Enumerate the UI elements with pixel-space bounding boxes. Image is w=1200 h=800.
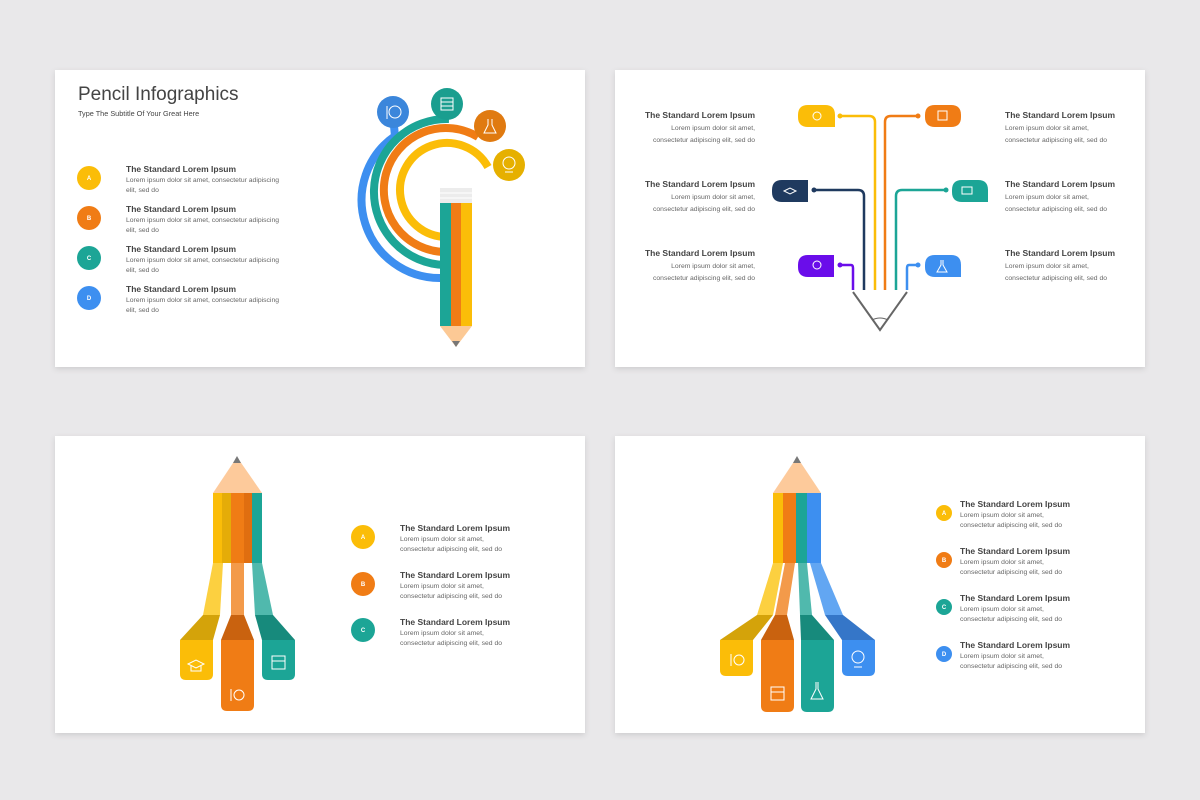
left texts: consectetur adipiscing elit, sed do	[653, 206, 755, 213]
legend: consectetur adipiscing elit, sed do	[960, 663, 1062, 670]
pencil	[180, 456, 295, 711]
pencil lines	[814, 116, 946, 290]
panel: pencil arcs	[55, 70, 585, 367]
panel: three branch pencil	[55, 436, 585, 733]
left texts	[645, 110, 755, 282]
left texts: consectetur adipiscing elit, sed do	[653, 137, 755, 144]
legend: A	[942, 511, 947, 517]
legend: The Standard Lorem Ipsum	[400, 523, 510, 533]
legend list: Lorem ipsum dolor sit amet, consectetur adipiscing	[126, 217, 279, 224]
pencil	[720, 456, 875, 712]
left texts: The Standard Lorem Ipsum	[645, 110, 755, 120]
legend	[936, 499, 1070, 670]
legend list	[77, 164, 279, 314]
legend list: C	[87, 256, 92, 262]
legend: consectetur adipiscing elit, sed do	[400, 640, 502, 647]
legend: consectetur adipiscing elit, sed do	[960, 616, 1062, 623]
panel: four branch pencil	[615, 436, 1145, 733]
left texts: The Standard Lorem Ipsum	[645, 248, 755, 258]
legend list: A	[87, 176, 92, 182]
icon circles	[377, 96, 409, 128]
legend list: elit, sed do	[126, 307, 159, 314]
legend: The Standard Lorem Ipsum	[400, 570, 510, 580]
subtitle: Type The Subtitle Of Your Great Here	[78, 109, 199, 118]
legend list: Lorem ipsum dolor sit amet, consectetur adipiscing	[126, 297, 279, 304]
right texts: consectetur adipiscing elit, sed do	[1005, 137, 1107, 144]
legend: D	[942, 652, 947, 658]
left texts: consectetur adipiscing elit, sed do	[653, 275, 755, 282]
legend list: The Standard Lorem Ipsum	[126, 204, 236, 214]
legend: Lorem ipsum dolor sit amet,	[960, 512, 1044, 519]
legend: Lorem ipsum dolor sit amet,	[400, 536, 484, 543]
right texts: Lorem ipsum dolor sit amet,	[1005, 125, 1089, 132]
legend: Lorem ipsum dolor sit amet,	[960, 606, 1044, 613]
left texts: Lorem ipsum dolor sit amet,	[671, 125, 755, 132]
right texts: consectetur adipiscing elit, sed do	[1005, 206, 1107, 213]
legend list: B	[87, 216, 92, 222]
legend: B	[942, 558, 947, 564]
legend: The Standard Lorem Ipsum	[400, 617, 510, 627]
legend: consectetur adipiscing elit, sed do	[960, 522, 1062, 529]
legend: The Standard Lorem Ipsum	[960, 640, 1070, 650]
left texts: Lorem ipsum dolor sit amet,	[671, 194, 755, 201]
legend list: elit, sed do	[126, 267, 159, 274]
legend: C	[361, 628, 366, 634]
legend: consectetur adipiscing elit, sed do	[960, 569, 1062, 576]
legend: Lorem ipsum dolor sit amet,	[400, 630, 484, 637]
legend: consectetur adipiscing elit, sed do	[400, 546, 502, 553]
icon tabs	[772, 105, 988, 277]
legend list: elit, sed do	[126, 187, 159, 194]
right texts: The Standard Lorem Ipsum	[1005, 179, 1115, 189]
legend list: The Standard Lorem Ipsum	[126, 164, 236, 174]
legend: The Standard Lorem Ipsum	[960, 499, 1070, 509]
title: Pencil Infographics	[78, 84, 239, 105]
left texts: Lorem ipsum dolor sit amet,	[671, 263, 755, 270]
right texts: Lorem ipsum dolor sit amet,	[1005, 194, 1089, 201]
right texts: Lorem ipsum dolor sit amet,	[1005, 263, 1089, 270]
legend: B	[361, 582, 366, 588]
legend list: The Standard Lorem Ipsum	[126, 244, 236, 254]
right texts: The Standard Lorem Ipsum	[1005, 110, 1115, 120]
panel: branching lines pencil	[615, 70, 1145, 367]
legend list: Lorem ipsum dolor sit amet, consectetur adipiscing	[126, 257, 279, 264]
legend list: elit, sed do	[126, 227, 159, 234]
legend: Lorem ipsum dolor sit amet,	[400, 583, 484, 590]
right texts: The Standard Lorem Ipsum	[1005, 248, 1115, 258]
legend	[351, 523, 510, 647]
legend list: Lorem ipsum dolor sit amet, consectetur adipiscing	[126, 177, 279, 184]
legend: A	[361, 535, 366, 541]
right texts: consectetur adipiscing elit, sed do	[1005, 275, 1107, 282]
legend list: The Standard Lorem Ipsum	[126, 284, 236, 294]
legend: Lorem ipsum dolor sit amet,	[960, 559, 1044, 566]
legend list: D	[87, 296, 92, 302]
legend: The Standard Lorem Ipsum	[960, 593, 1070, 603]
legend: The Standard Lorem Ipsum	[960, 546, 1070, 556]
right texts	[1005, 110, 1115, 282]
legend: consectetur adipiscing elit, sed do	[400, 593, 502, 600]
legend: C	[942, 605, 947, 611]
left texts: The Standard Lorem Ipsum	[645, 179, 755, 189]
legend: Lorem ipsum dolor sit amet,	[960, 653, 1044, 660]
pencil with arcs	[362, 88, 525, 347]
